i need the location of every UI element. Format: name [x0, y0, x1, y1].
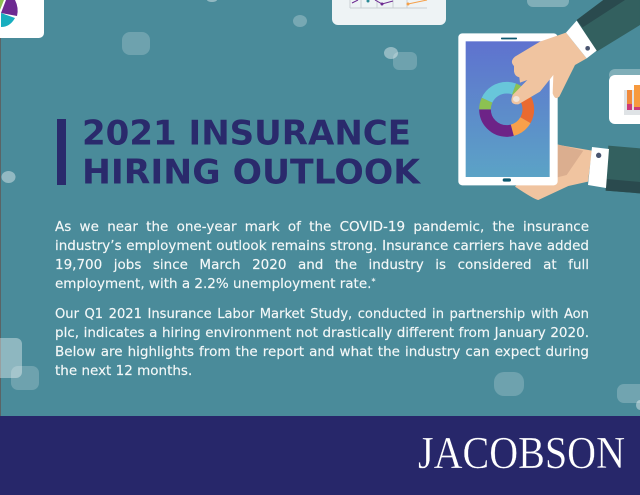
intro paragraph 1: As we near the one-year mark of the COVID-19 pandemic, the insurance: [55, 219, 589, 235]
illustration: tablet held by two hands: [458, 0, 640, 200]
intro paragraph 2: Our Q1 2021 Insurance Labor Market Study, conducted in partnership with Aon: [55, 307, 589, 322]
intro paragraph 2: the next 12 months.: [55, 363, 192, 379]
intro paragraph 2: [55, 307, 589, 379]
card: pie chart, top left: [0, 0, 44, 38]
upper hand: [511, 0, 640, 104]
title accent bar: [57, 119, 66, 185]
intro paragraph 1: [55, 219, 589, 292]
lower hand: [515, 143, 640, 200]
title: [82, 114, 422, 192]
intro paragraph 1: 19,700 jobs since March 2020 and the industry is considered at full: [55, 257, 589, 273]
intro paragraph 1: employment, with a 2.2% unemployment rate.*: [55, 276, 375, 292]
intro paragraph 2: plc, indicates a hiring environment not drastically different from January 2020.: [55, 325, 589, 341]
card: bar chart, right: [609, 75, 640, 124]
intro paragraph 2: Below are highlights from the report and what the industry can expect during: [55, 344, 589, 360]
card: line chart, top centre: [332, 0, 446, 25]
title: 2021 INSURANCE: [82, 114, 411, 154]
footer band: [0, 416, 640, 495]
tablet: [458, 33, 558, 185]
donut chart: [485, 88, 528, 131]
intro paragraph 1: industry’s employment outlook remains strong. Insurance carriers have added: [55, 238, 589, 254]
title: HIRING OUTLOOK: [82, 152, 422, 192]
